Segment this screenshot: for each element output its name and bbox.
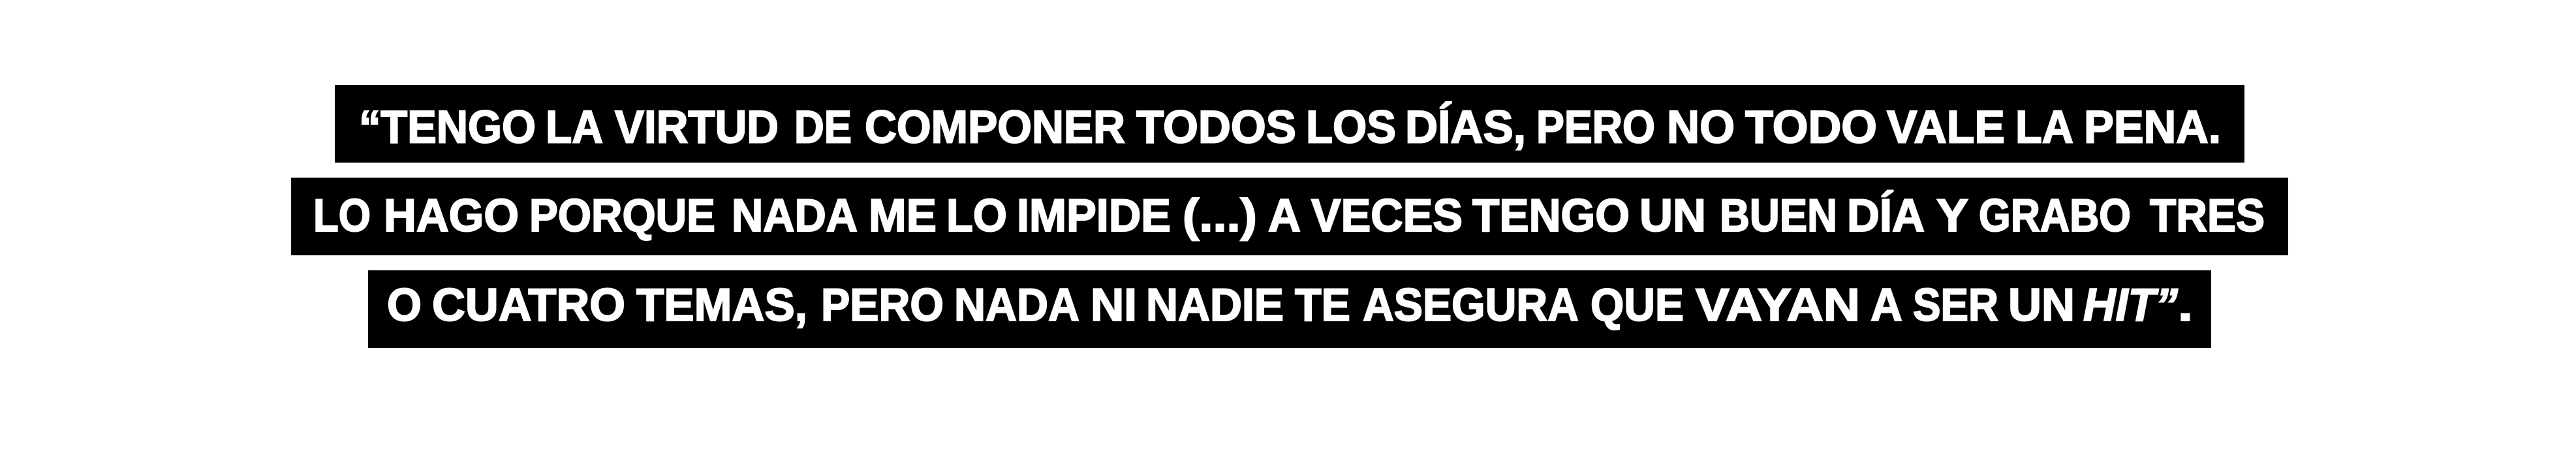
text line 2: BUEN (1720, 189, 1837, 241)
text line 2: (...) (1183, 189, 1257, 241)
text line 1 (359, 101, 2221, 153)
black highlight bar 2 (291, 178, 2288, 255)
text line 3: NADA (954, 279, 1079, 330)
text line 3: TE (1295, 279, 1350, 330)
text line 2: A (1268, 189, 1301, 241)
text line 3: QUE (1591, 279, 1684, 330)
text line 2: NADA (732, 189, 858, 241)
text line 3: TEMAS, (636, 279, 807, 330)
text line 1: DÍAS, (1405, 101, 1526, 153)
text line 3: HIT” (2083, 279, 2179, 330)
text line 1: VALE (1887, 101, 2005, 153)
quote line 3 (368, 270, 2211, 348)
quote line 1 (335, 85, 2244, 163)
text line 3: SER (1913, 279, 1998, 330)
text line 2: IMPIDE (1017, 189, 1171, 241)
text line 1: COMPONER (865, 101, 1125, 153)
text line 2: TRES (2150, 189, 2265, 241)
text line 3: PERO (821, 279, 944, 330)
text line 2: TENGO (1472, 189, 1630, 241)
text line 1: LA (546, 101, 603, 153)
text line 1: TODO (1745, 101, 1877, 153)
text line 2: VECES (1311, 189, 1463, 241)
text line 2 (313, 189, 2265, 241)
text line 3: ASEGURA (1363, 279, 1579, 330)
text line 3: CUATRO (432, 279, 625, 330)
text line 3 (387, 279, 2193, 330)
text line 1: LOS (1306, 101, 1396, 153)
text line 3: VAYAN (1696, 279, 1860, 330)
text line 3: A (1870, 279, 1902, 330)
text line 2: LO (946, 189, 1007, 241)
text line 2: Y (1936, 189, 1968, 241)
text line 1: LA (2015, 101, 2073, 153)
text line 3: UN (2008, 279, 2075, 330)
text line 2: HAGO (384, 189, 519, 241)
text line 2: ME (869, 189, 937, 241)
text line 3: . (2178, 279, 2193, 330)
text line 2: UN (1639, 189, 1706, 241)
text line 1: TODOS (1136, 101, 1296, 153)
text line 3: NADIE (1146, 279, 1284, 330)
text line 1: VIRTUD (615, 101, 779, 153)
text line 2: LO (313, 189, 371, 241)
text line 2: PORQUE (529, 189, 715, 241)
black highlight bar 3 (368, 270, 2211, 348)
text line 1: DE (794, 101, 852, 153)
text line 1: “TENGO (359, 101, 536, 153)
text line 3: O (387, 279, 422, 330)
text line 1: NO (1667, 101, 1735, 153)
text line 1: PENA. (2084, 101, 2221, 153)
text line 3: NI (1091, 279, 1137, 330)
black highlight bar 1 (335, 85, 2244, 163)
text line 2: DÍA (1847, 189, 1925, 241)
text line 1: PERO (1536, 101, 1655, 153)
quote line 2 (291, 178, 2288, 255)
text line 2: GRABO (1979, 189, 2131, 241)
